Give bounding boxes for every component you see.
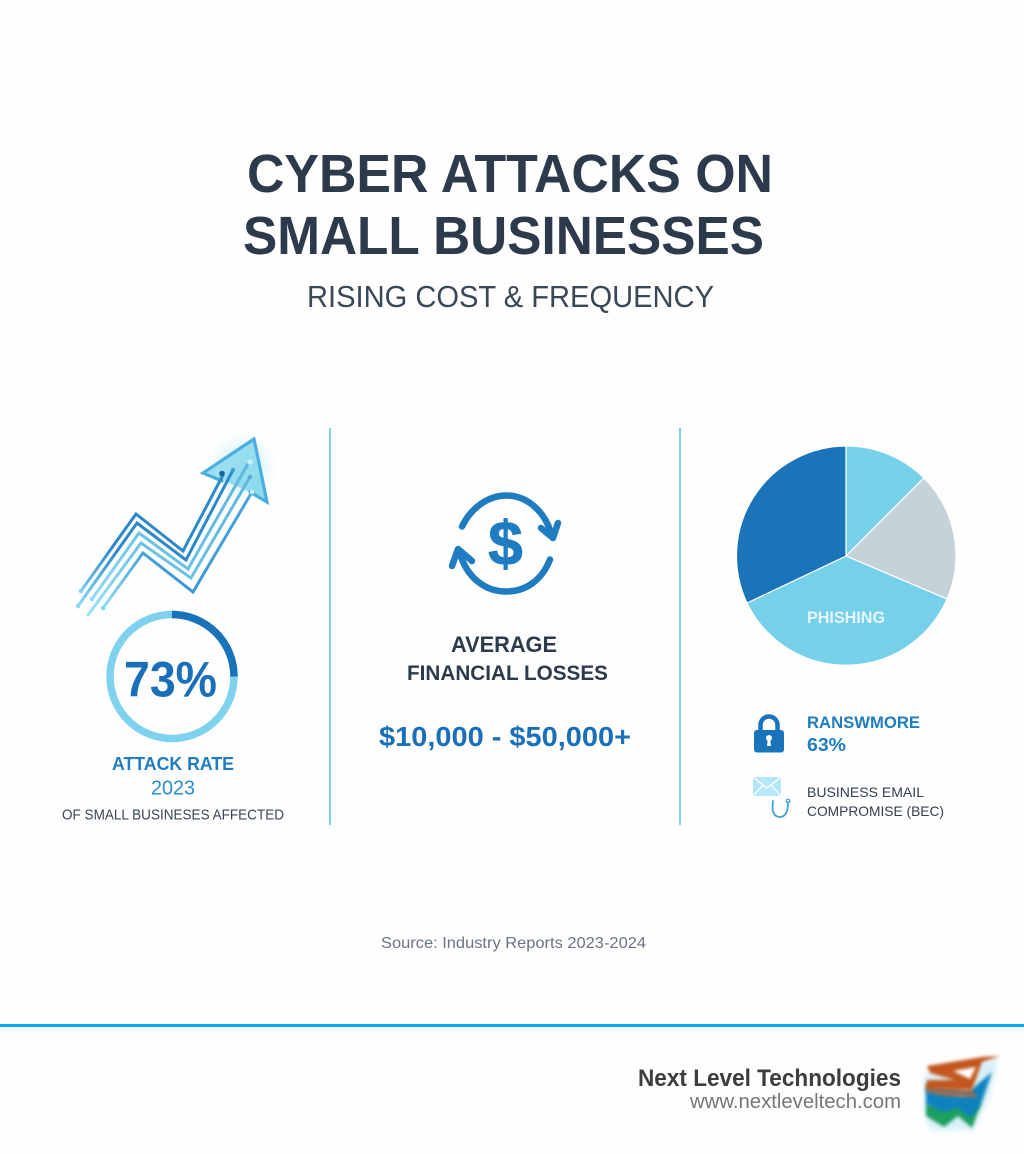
heading: average financial losses: FINANCIAL LOSSES	[407, 662, 608, 685]
label: attack rate: ATTACK RATE	[112, 754, 234, 774]
donut ring: 73%	[110, 614, 234, 738]
icon: rising circuit arrow	[76, 432, 278, 615]
label: business email compromise	[807, 784, 944, 819]
stat: 63%: 63%	[807, 735, 846, 755]
heading: average financial losses: AVERAGE	[451, 632, 557, 657]
icon: dollar with circular arrows: $	[488, 510, 523, 579]
stat: loss range: $10,000 - $50,000+	[379, 721, 631, 752]
label: year: 2023	[151, 778, 195, 800]
icon: dollar with circular arrows	[452, 496, 558, 592]
pie chart	[736, 446, 956, 665]
stat: 73%: 73%	[124, 652, 217, 708]
icon: padlock	[754, 716, 784, 752]
panel: attack types	[736, 446, 956, 819]
panel: financial losses	[379, 496, 631, 752]
heading: average financial losses	[407, 632, 608, 685]
title: CYBER ATTACKS ON	[247, 144, 773, 204]
footer rule	[0, 1024, 1024, 1027]
icon: email with hook	[753, 777, 790, 817]
pie label: phishing: PHISHING	[807, 608, 885, 627]
label: ransomware: RANSWMORE	[807, 714, 920, 732]
footer: company name: Next Level Technologies	[638, 1065, 901, 1092]
source note: Source: Industry Reports 2023-2024	[381, 935, 646, 952]
footer: website: www.nextleveltech.com	[689, 1091, 901, 1113]
title: SMALL BUSINESSES	[243, 206, 764, 266]
logo: layered chart mark	[924, 1056, 1000, 1130]
label: business email compromise: COMPROMISE (BEC)	[807, 803, 944, 819]
title	[243, 144, 773, 266]
caption: businesses affected: OF SMALL BUSINESES AFFECTED	[62, 808, 284, 824]
panel: attack rate	[62, 432, 284, 824]
subtitle: RISING COST & FREQUENCY	[307, 279, 714, 314]
label: business email compromise: BUSINESS EMAIL	[807, 784, 924, 800]
